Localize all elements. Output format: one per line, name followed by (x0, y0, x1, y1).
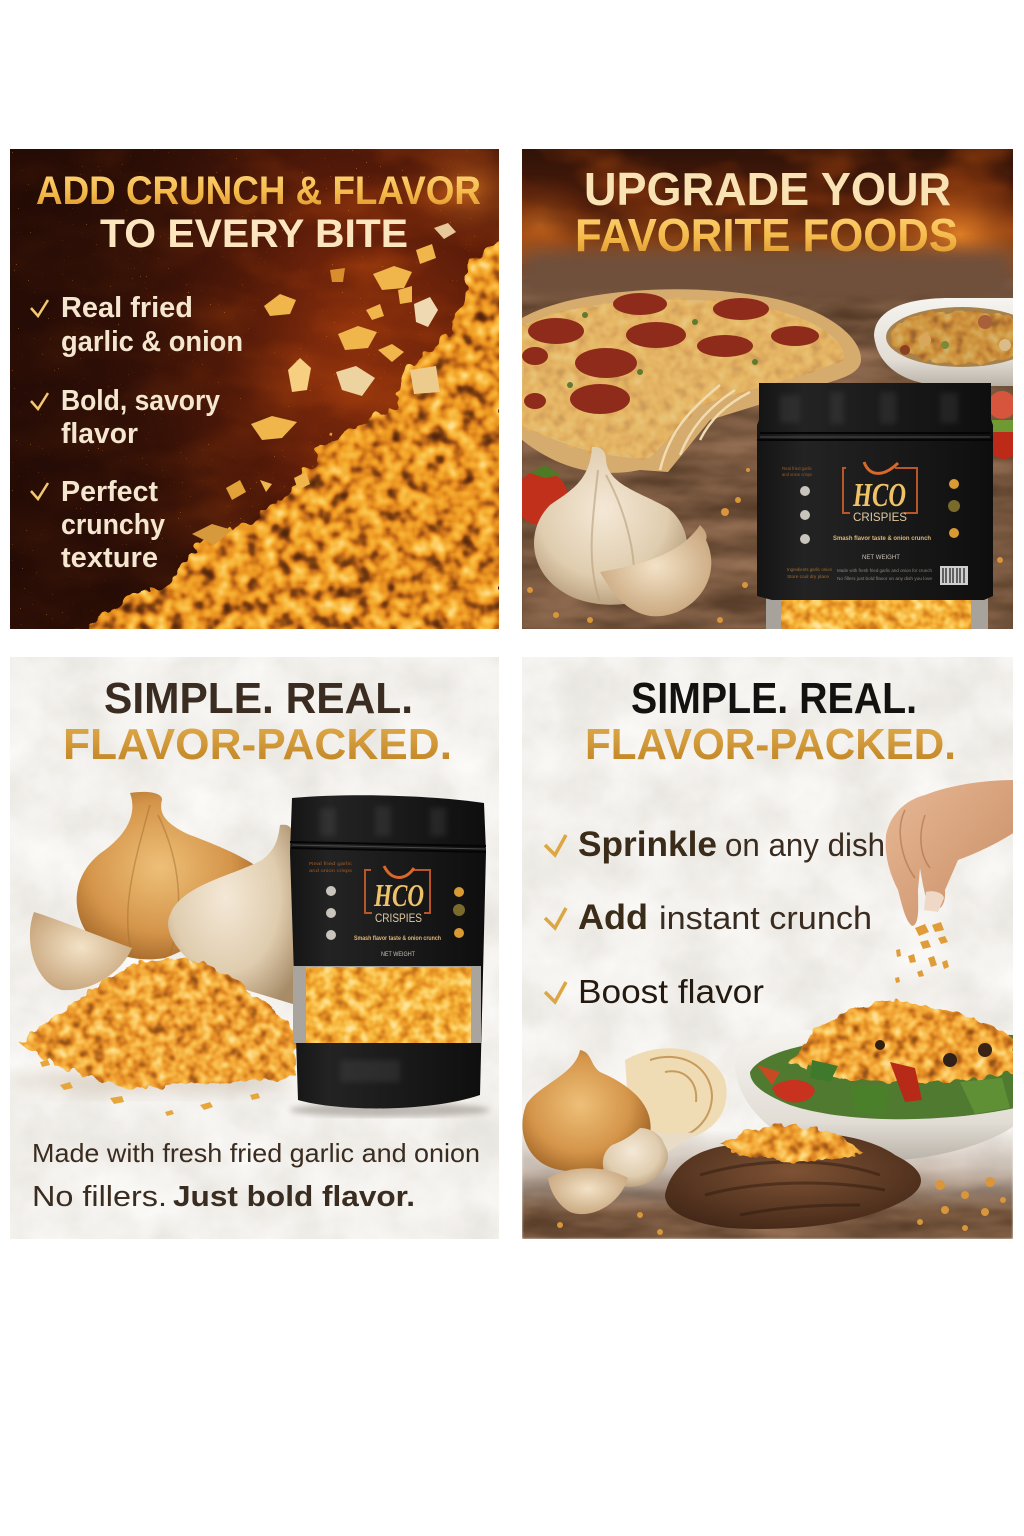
heading (37, 176, 480, 248)
benefit: perfect crunchy texture (30, 480, 165, 568)
garlic clove (30, 912, 132, 990)
seared steak (665, 1126, 921, 1229)
heading: FLAVOR-PACKED. (585, 720, 956, 769)
marble background (10, 657, 499, 1239)
pouch small print: Smash flavor taste & onion crunch (354, 936, 441, 942)
marble background and table (522, 657, 1013, 1239)
product pouch (757, 383, 993, 632)
benefit: bold savory flavor (30, 389, 220, 444)
heading: SIMPLE. REAL. (631, 674, 917, 723)
salad bowl (735, 1000, 1015, 1161)
heading: FLAVOR-PACKED. (63, 720, 452, 769)
benefit: real fried garlic and onion: garlic & onion (61, 326, 243, 358)
pouch small print: No fillers just bold flavor on any dish you love (837, 576, 933, 581)
benefit: bold savory flavor: flavor (61, 418, 138, 450)
pouch small print: Ingredients garlic onion (787, 567, 832, 572)
usage list (545, 825, 885, 1010)
tagline: Just bold flavor. (173, 1181, 415, 1213)
pouch small print: Store cool dry place (787, 574, 830, 579)
panel: add crunch and flavor (10, 149, 499, 629)
pouch logo (843, 462, 917, 524)
usage: add crunch: instant crunch (659, 900, 872, 936)
tagline (32, 1138, 480, 1213)
onion (77, 792, 261, 959)
whole onion (522, 1050, 651, 1172)
pouch small print: and onion crisps (782, 472, 813, 477)
product pouch (290, 795, 490, 1117)
usage: add crunch: Add (578, 898, 648, 937)
flying flakes (192, 223, 456, 545)
benefit: real fried garlic and onion: Real fried (61, 292, 193, 324)
heading: UPGRADE YOUR (584, 163, 951, 215)
pouch small print: and onion crisps (309, 868, 353, 873)
falling flakes (895, 922, 949, 983)
heading: FAVORITE FOODS (575, 209, 958, 261)
pouch small print (309, 861, 441, 958)
pouch small print: NET WEIGHT (862, 555, 900, 561)
usage: sprinkle (545, 825, 885, 864)
benefit: perfect crunchy texture: crunchy (61, 509, 165, 541)
pouch small print (782, 466, 933, 581)
garlic bulb (168, 825, 296, 1005)
scattered crumbs (557, 1177, 1006, 1235)
pouch small print: NET WEIGHT (381, 952, 415, 958)
pouch logo: HCO (852, 477, 906, 514)
panel: upgrade your favorite foods (522, 149, 1013, 629)
pouch window (293, 966, 481, 1043)
usage: sprinkle: on any dish (725, 827, 885, 863)
heading: SIMPLE. REAL. (104, 674, 413, 723)
side bowl (874, 298, 1024, 386)
tomatoes (514, 391, 1019, 525)
tagline: No fillers. (32, 1181, 167, 1213)
infographic: four product panels (10, 149, 1013, 1239)
heading (63, 674, 452, 769)
heading: TO EVERY BITE (100, 212, 408, 256)
heading (578, 172, 956, 252)
pouch small print: Real fried garlic (782, 466, 813, 471)
pouch logo: CRISPIES (853, 510, 907, 524)
pouch logo: CRISPIES (375, 911, 422, 925)
fiery background (10, 149, 499, 629)
background with flames and wood table (480, 149, 1024, 629)
pouch logo: HCO (373, 877, 424, 913)
hand sprinkling (886, 780, 1015, 926)
benefit: perfect crunchy texture: Perfect (61, 476, 158, 508)
garlic bulb (534, 447, 688, 605)
cut onion (625, 1048, 727, 1138)
panel: how to use (522, 657, 1015, 1239)
heading (585, 674, 956, 769)
garlic clove (600, 525, 711, 616)
crispy flake heap (60, 240, 505, 640)
flake pile (10, 959, 296, 1094)
pouch small print: Real fried garlic (309, 861, 353, 866)
usage: boost flavor: Boost flavor (578, 973, 764, 1010)
benefit: bold savory flavor: Bold, savory (61, 385, 220, 417)
benefit: real fried garlic and onion (31, 292, 243, 358)
tagline: Made with fresh fried garlic and onion (32, 1138, 480, 1168)
benefit: perfect crunchy texture: texture (61, 542, 158, 574)
scattered crumbs (527, 468, 1003, 623)
pouch logo (365, 866, 430, 925)
usage: sprinkle: Sprinkle (578, 825, 717, 864)
heading: ADD CRUNCH & FLAVOR (36, 169, 481, 213)
usage: add crunch (545, 898, 872, 937)
pouch badges (800, 479, 960, 544)
pizza (522, 289, 861, 473)
pouch barcode (940, 566, 968, 585)
panel: simple real flavor-packed ingredients (10, 657, 499, 1239)
pouch badges (326, 886, 465, 940)
pouch small print: Made with fresh fried garlic and onion for crunch (837, 568, 932, 573)
pouch small print: Smash flavor taste & onion crunch (833, 535, 931, 542)
garlic (548, 1128, 700, 1214)
benefit list (31, 292, 243, 574)
loose flakes (40, 1060, 260, 1116)
